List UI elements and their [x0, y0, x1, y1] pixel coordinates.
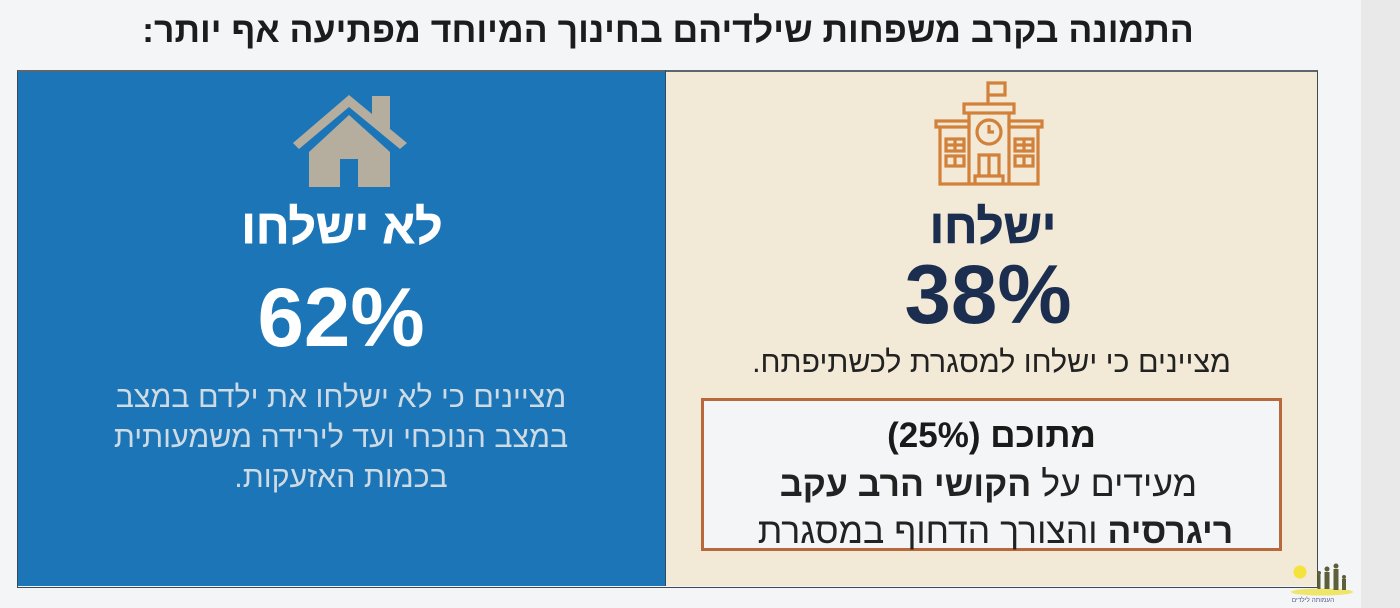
callout line 1: מתוכם (25%)	[887, 416, 1096, 455]
logo caption: העמותה לילדים	[1292, 596, 1334, 604]
panel: will send (beige)	[666, 70, 1317, 586]
right side strip	[1361, 0, 1400, 608]
text: explanation: בכמות האזעקות.	[234, 460, 448, 494]
icon: house	[293, 95, 407, 187]
callout: regression	[701, 398, 1282, 551]
stat: 38%: 38%	[904, 247, 1072, 341]
panel: did not send (blue)	[18, 70, 666, 586]
text: explanation: מציינים כי לא ישלחו את ילדם במצב	[116, 380, 566, 414]
title: התמונה בקרב משפחות שילדיהם בחינוך המיוחד מפתיעה אף יותר:	[142, 10, 1194, 50]
text: explanation	[114, 380, 568, 494]
text: explanation: במצב הנוכחי ועד לירידה משמעותית	[114, 420, 568, 454]
text: explanation: מציינים כי ישלחו למסגרת לכשתיפתח.	[752, 345, 1231, 379]
icon: school building	[934, 81, 1044, 186]
callout line 2: מעידים על הקושי הרב עקב	[780, 464, 1197, 504]
panel outline	[17, 70, 1318, 588]
panel divider	[665, 70, 666, 586]
callout line 3: ריגרסיה והצורך הדחוף במסגרת	[758, 511, 1233, 551]
logo	[1291, 564, 1353, 604]
stat: 62%: 62%	[257, 270, 425, 364]
heading: will send: ישלחו	[930, 201, 1056, 254]
heading: did not send: לא ישלחו	[241, 201, 443, 254]
